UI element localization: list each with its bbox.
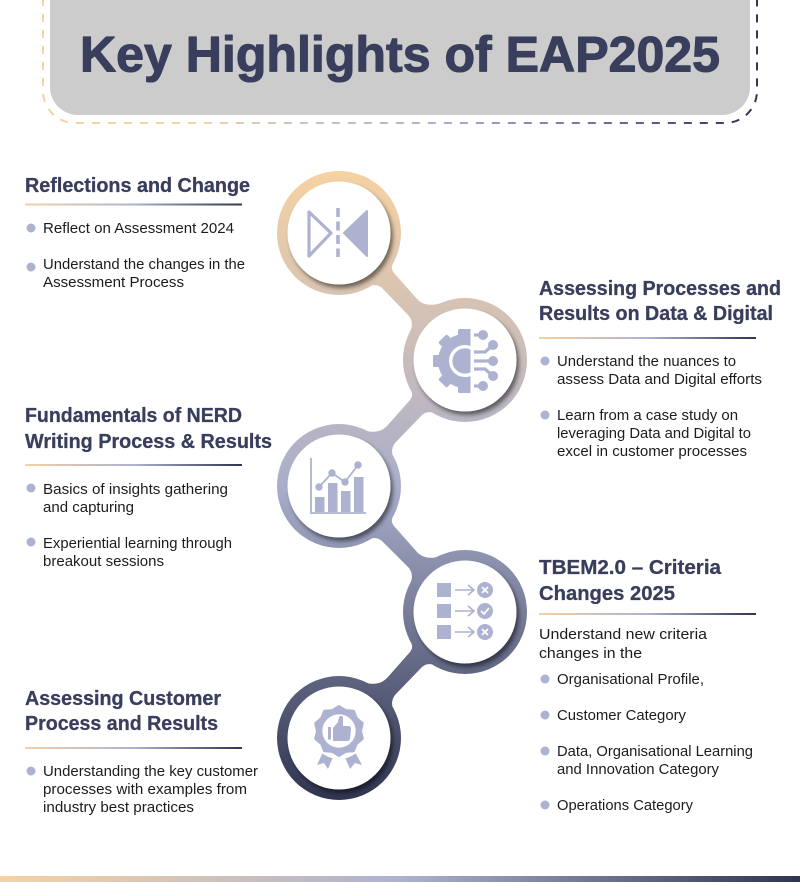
bullet: changes: Understand the changes in the — [43, 256, 245, 273]
bullet: data category: and Innovation Category — [557, 761, 719, 778]
heading — [539, 556, 722, 605]
inner white discs — [288, 182, 516, 790]
header panel — [43, 0, 757, 123]
icon: checklist with arrows — [437, 582, 493, 640]
bullet: experiential learning: Experiential learning through — [43, 535, 232, 552]
bullet: nuances — [540, 353, 762, 388]
section: Fundamentals of NERD Writing — [25, 404, 272, 570]
heading: Fundamentals of NERD — [25, 404, 242, 427]
ring chain — [277, 171, 527, 800]
section: Assessing Customer Process and Results — [25, 687, 258, 816]
bullet: operations category: Operations Category — [557, 797, 693, 814]
bullet: customer processes: Understanding the key customer — [43, 763, 258, 780]
heading underline — [539, 337, 756, 339]
heading underline — [25, 747, 242, 749]
heading underline — [539, 613, 756, 615]
bullet: customer processes: industry best practices — [43, 799, 194, 816]
heading: Reflections and Change — [25, 174, 250, 197]
bullet: customer processes: processes with examples from — [43, 781, 247, 798]
bullet: nuances: Understand the nuances to — [557, 353, 736, 370]
bullet: customer processes — [26, 763, 258, 816]
bullet: case study: leveraging Data and Digital to — [557, 425, 751, 442]
icon: mirrored triangles — [309, 208, 367, 257]
intro text — [539, 626, 708, 662]
icon: gear with circuit — [433, 329, 498, 393]
icon: award badge with thumbs up — [311, 703, 367, 769]
bullet: changes — [26, 256, 245, 291]
title background — [50, 0, 750, 115]
bullet: experiential learning: breakout sessions — [43, 553, 164, 570]
bullet: changes: Assessment Process — [43, 274, 184, 291]
intro text: changes in the — [539, 645, 642, 662]
heading: Writing Process & Results — [25, 430, 272, 453]
intro text: Understand new criteria — [539, 626, 708, 643]
bullet: reflect: Reflect on Assessment 2024 — [43, 220, 234, 237]
bullet: customer category: Customer Category — [557, 707, 686, 724]
heading: TBEM2.0 – Criteria — [539, 556, 722, 579]
heading — [25, 687, 221, 735]
heading: Assessing Customer — [25, 687, 221, 710]
bullet: organisational profile: Organisational Profile, — [557, 671, 704, 688]
heading — [539, 277, 781, 325]
bullet: experiential learning — [26, 535, 232, 570]
heading: Assessing Processes and — [539, 277, 781, 300]
bullet: case study: Learn from a case study on — [557, 407, 738, 424]
bullet: nuances: assess Data and Digital efforts — [557, 371, 762, 388]
bullet: insights: and capturing — [43, 499, 134, 516]
heading: Changes 2025 — [539, 582, 675, 605]
heading: Process and Results — [25, 712, 218, 735]
bullet: case study: excel in customer processes — [557, 443, 747, 460]
section: Assessing Processes and Results on Data & Digital — [539, 277, 781, 460]
bullet: insights — [26, 481, 228, 516]
heading underline — [25, 204, 242, 206]
bottom gradient bar — [0, 876, 800, 882]
title: Key Highlights of EAP2025 — [80, 26, 720, 82]
section: TBEM2.0 Criteria Changes 2025 — [539, 556, 756, 814]
heading underline — [25, 464, 242, 466]
bullet: data category: Data, Organisational Learning — [557, 743, 753, 760]
heading: Results on Data & Digital — [539, 302, 773, 325]
timeline: connected rings — [277, 171, 527, 800]
bullet: case study — [540, 407, 751, 460]
dashed header border — [43, 0, 757, 123]
section: Reflections and Change — [25, 174, 250, 291]
bullet: data category — [540, 743, 753, 778]
bullet: insights: Basics of insights gathering — [43, 481, 228, 498]
heading — [25, 404, 272, 453]
icon: bar and line chart — [311, 458, 366, 513]
